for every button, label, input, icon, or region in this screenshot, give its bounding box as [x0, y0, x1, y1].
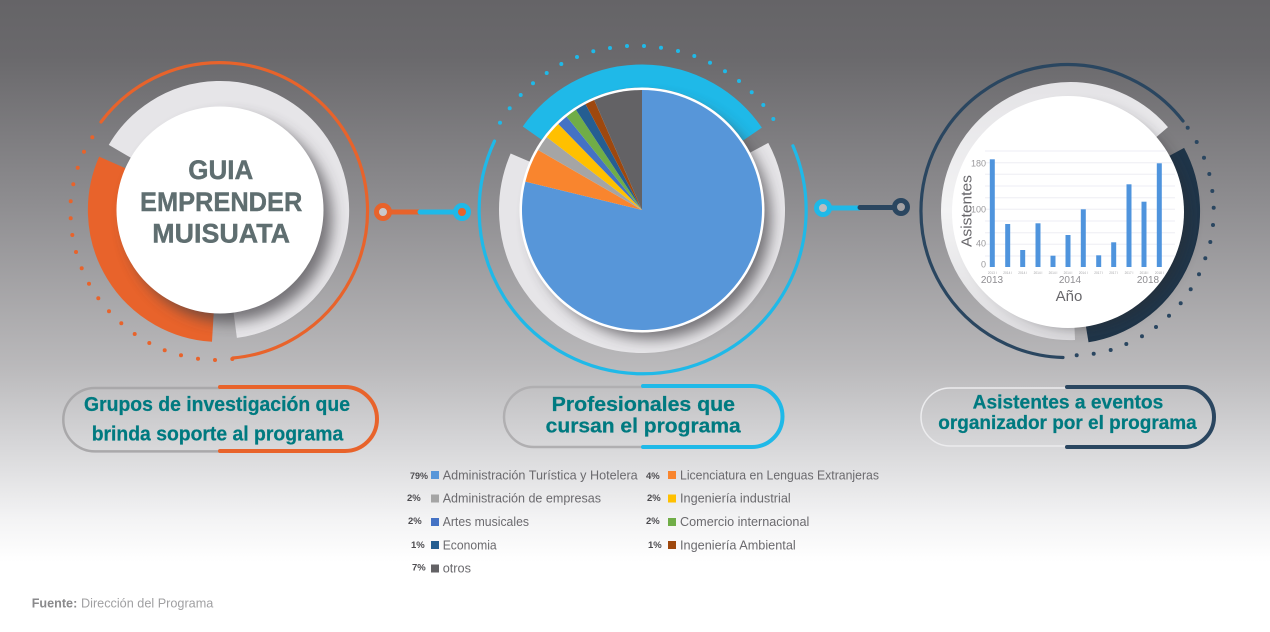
thin navy arc: [921, 65, 1183, 358]
thin blue arc: [479, 141, 806, 374]
pie legend: [407, 468, 879, 576]
bar tick labels: 2013 I: [988, 271, 997, 275]
source note: Fuente:: [32, 595, 77, 610]
caption pill: grupos de investigación: [63, 387, 377, 451]
legend labels: Artes musicales: [443, 514, 529, 529]
connector: blue to navy: [816, 200, 908, 214]
bar tick labels: 2014 I: [1064, 271, 1073, 275]
legend percentages: 2%: [646, 516, 660, 527]
legend percentages: 79%: [410, 471, 429, 482]
white circle: [116, 106, 324, 314]
x axis years: 2014: [1059, 275, 1082, 286]
legend swatches: [431, 471, 676, 572]
bar tick labels: [988, 272, 1164, 274]
thick blue arc: [532, 76, 752, 134]
bar tick labels: 2014 I: [1079, 271, 1088, 275]
circle shadow: [968, 108, 1188, 328]
y axis values: 100: [971, 204, 986, 214]
circle title: EMPRENDER: [140, 187, 302, 217]
bar tick labels: 2017 I: [1125, 271, 1134, 275]
legend percentages: 7%: [412, 562, 426, 574]
caption pill: asistentes: [921, 387, 1214, 447]
bar tick labels: 2014 I: [1034, 271, 1043, 275]
orange dotted arc: [69, 135, 234, 362]
source note: Dirección del Programa: [81, 595, 214, 610]
legend labels: Administración de empresas: [443, 490, 601, 506]
bar tick labels: 2014 I: [1003, 271, 1012, 275]
legend percentages: 1%: [648, 540, 662, 551]
pie chart: [522, 90, 762, 330]
caption pill: asistentes: organizador por el programa: [938, 413, 1197, 434]
navy dotted arc: [1075, 126, 1216, 357]
blue dotted arc: [498, 44, 775, 125]
bar tick labels: 2017 I: [1094, 271, 1103, 275]
legend percentages: 2%: [647, 493, 661, 504]
caption pill: profesionales: cursan el programa: [546, 415, 742, 437]
caption pill: grupos de investigación: Grupos de investigación que: [84, 394, 350, 416]
legend labels: Licenciatura en Lenguas Extranjeras: [680, 468, 879, 482]
x axis years: 2018: [1137, 275, 1160, 286]
bar chart: [960, 151, 1175, 305]
caption pill: profesionales: [504, 386, 782, 447]
caption pill: asistentes: Asistentes a eventos: [973, 392, 1163, 413]
outer thin orange arc: [101, 63, 368, 358]
circle shadow: [531, 99, 771, 339]
legend labels: Ingeniería Ambiental: [680, 538, 796, 552]
legend labels: Economia: [443, 538, 497, 552]
bars: [990, 159, 1162, 267]
thick navy arc: [1086, 155, 1185, 328]
bar tick labels: 2017 I: [1109, 271, 1118, 275]
panel: asistentes bar chart: [921, 65, 1216, 358]
circle title: MUISUATA: [152, 219, 290, 249]
legend percentages: 2%: [408, 516, 422, 527]
light grey ring: [954, 95, 1158, 327]
panel: guia emprender: [69, 63, 368, 362]
legend percentages: 2%: [407, 493, 421, 504]
x axis title: Año: [1056, 288, 1082, 305]
bar tick labels: 2018 I: [1155, 271, 1164, 275]
thick orange arc: [105, 164, 213, 325]
y axis values: 0: [981, 260, 986, 270]
legend labels: Comercio internacional: [680, 514, 809, 529]
y axis title: Asistentes: [960, 175, 976, 247]
legend labels: otros: [443, 560, 471, 576]
y axis values: [971, 158, 986, 270]
white circle: [952, 96, 1184, 328]
light grey ring: [512, 149, 772, 340]
x axis years: 2013: [981, 275, 1004, 286]
panel: profesionales pie chart: [479, 44, 806, 374]
circle title: [140, 155, 302, 249]
bar tick labels: 2018 I: [1140, 271, 1149, 275]
connector: orange to blue: [376, 206, 468, 218]
legend labels: Administración Turística y Hotelera: [443, 468, 638, 482]
circle shadow: [126, 116, 332, 322]
white pie border: [520, 88, 764, 332]
bar tick labels: 2014 I: [1018, 271, 1027, 275]
legend percentages: 1%: [411, 540, 425, 551]
caption pill: grupos de investigación: brinda soporte al programa: [92, 424, 344, 446]
legend percentages: 4%: [646, 471, 660, 482]
y axis values: 40: [976, 238, 986, 248]
circle title: GUIA: [188, 155, 253, 185]
grid lines: [985, 151, 1175, 256]
caption pill: profesionales: Profesionales que: [552, 394, 735, 416]
y axis values: 180: [971, 158, 986, 168]
light grey ring: [120, 94, 336, 325]
bar tick labels: 2014 I: [1049, 271, 1058, 275]
legend labels: [443, 468, 879, 576]
legend labels: Ingeniería industrial: [680, 490, 791, 506]
legend percentages: [407, 471, 662, 574]
x axis years: [981, 276, 1159, 283]
